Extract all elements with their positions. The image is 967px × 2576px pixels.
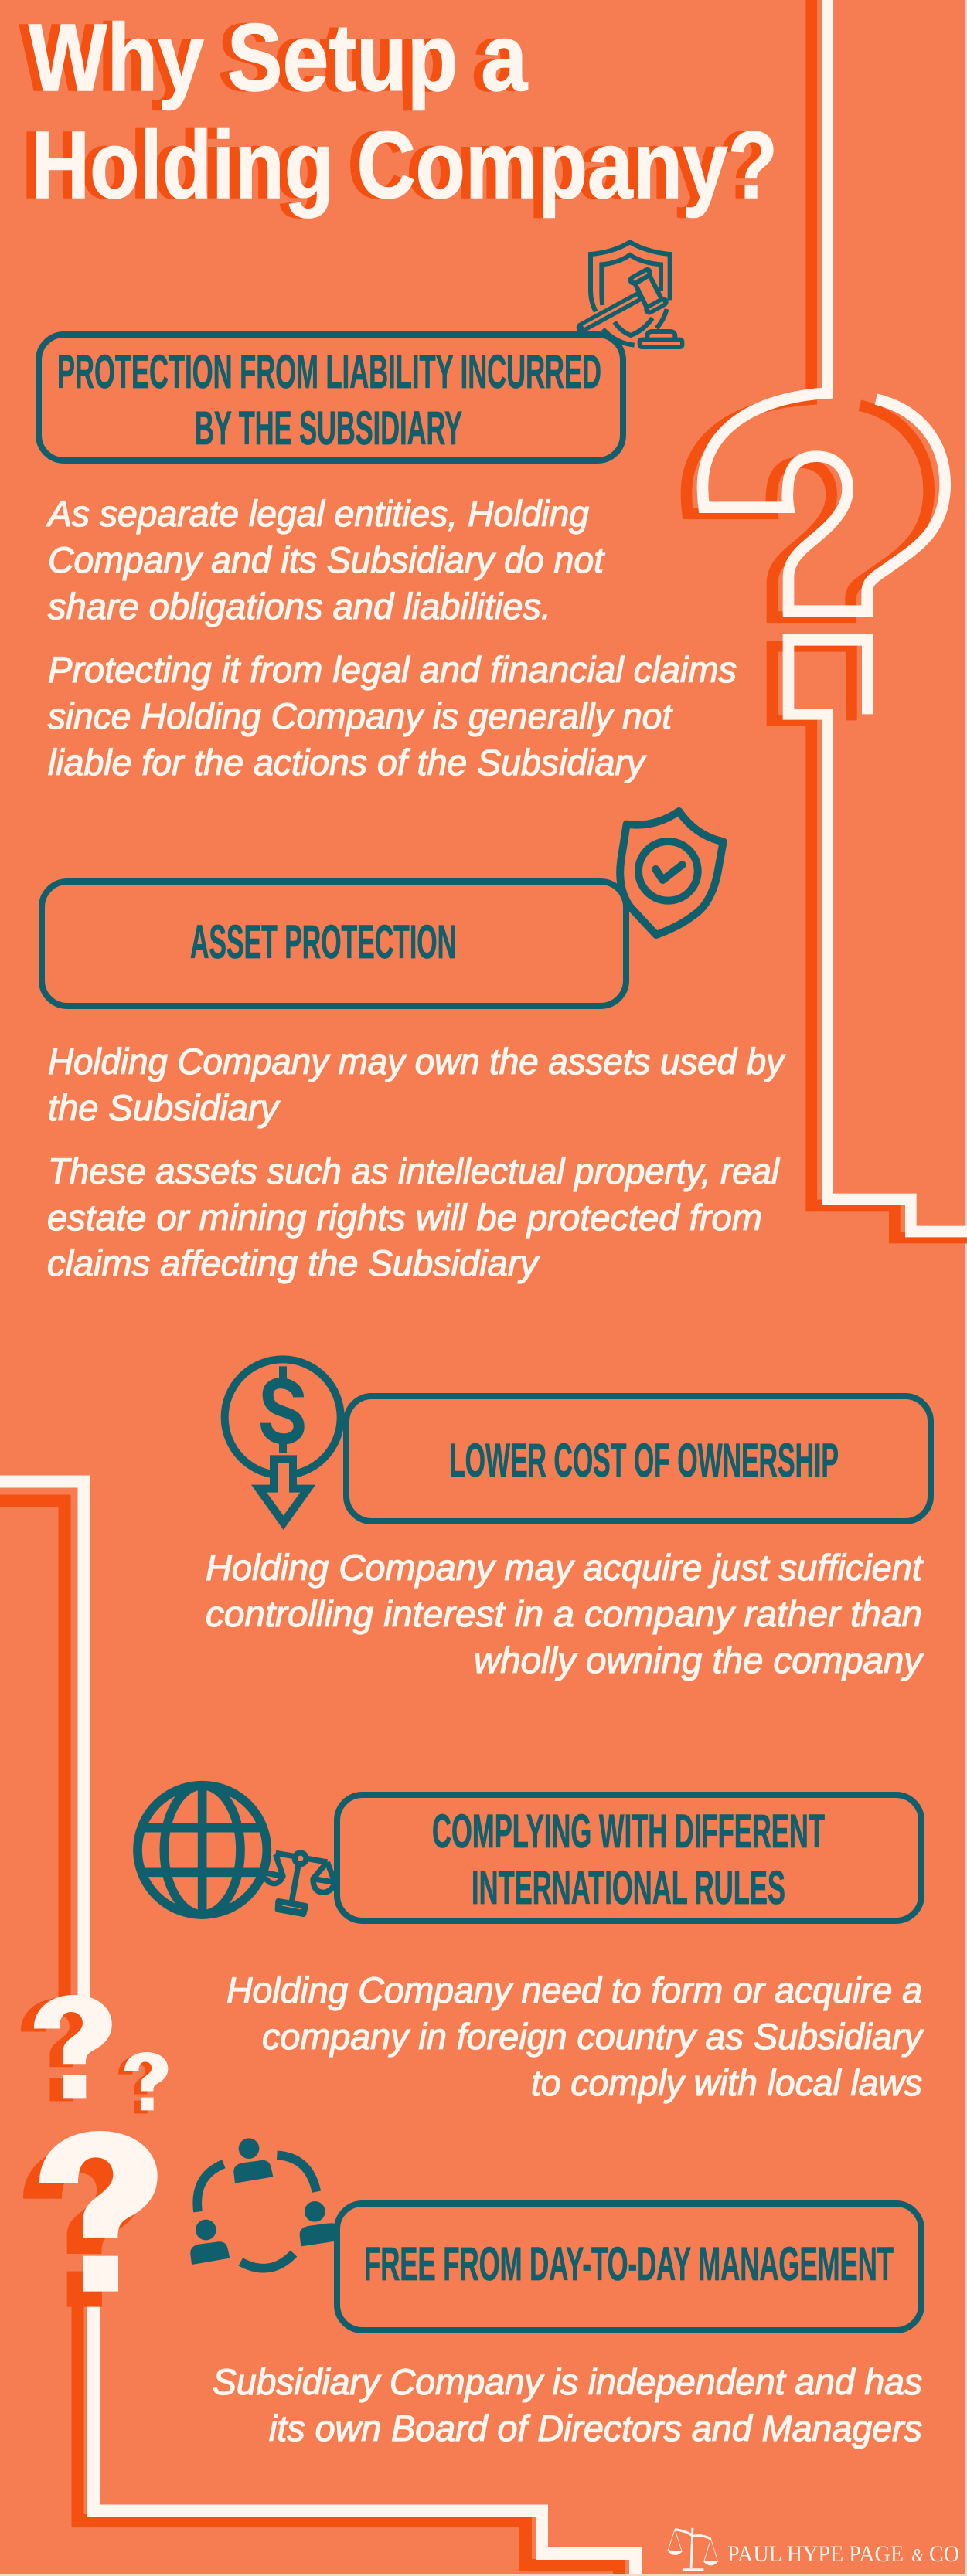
text block: since Holding Company is generally not xyxy=(48,695,673,736)
text block: Company and its Subsidiary do not xyxy=(48,539,605,580)
text block xyxy=(213,2361,922,2449)
text block: claims affecting the Subsidiary xyxy=(47,1242,540,1283)
title: Why Setup a xyxy=(19,5,519,111)
panel: international rules xyxy=(138,1786,924,2103)
text block: Protecting it from legal and financial claims xyxy=(48,649,737,690)
panel: free from day-to-day management xyxy=(190,2138,922,2449)
text block: Holding Company may acquire just sufficient xyxy=(206,1547,924,1588)
icon: globe with scales xyxy=(138,1786,335,1915)
heading box xyxy=(337,2204,921,2330)
text block: As separate legal entities, Holding xyxy=(46,493,589,534)
text block: Holding Company need to form or acquire a xyxy=(226,1969,922,2010)
panel: protection from liability xyxy=(39,242,737,783)
heading box xyxy=(337,1795,921,1921)
right connector line with outlined question mark xyxy=(686,0,967,1238)
heading: ASSET PROTECTION xyxy=(190,916,456,968)
title: Holding Company? xyxy=(31,113,778,219)
text block: share obligations and liabilities. xyxy=(48,586,551,627)
icon: three people in a cycle xyxy=(190,2138,339,2268)
text block: company in foreign country as Subsidiary xyxy=(262,2016,924,2057)
title xyxy=(19,5,778,219)
heading box xyxy=(346,1396,931,1521)
wordmark: CO xyxy=(929,2541,959,2567)
text block: Holding Company may own the assets used by xyxy=(48,1041,785,1082)
heading box xyxy=(42,882,626,1006)
title: Holding Company? xyxy=(22,113,768,219)
heading xyxy=(432,1805,825,1914)
text block: its own Board of Directors and Managers xyxy=(269,2408,922,2449)
heading xyxy=(57,345,601,454)
icon: dollar with down arrow xyxy=(225,1359,341,1530)
wordmark: & xyxy=(911,2546,924,2566)
heading box xyxy=(39,335,623,460)
panel: lower cost of ownership xyxy=(206,1359,931,1681)
icon: shield and gavel xyxy=(582,242,683,347)
logo: Paul Hype Page & Co xyxy=(668,2528,959,2570)
icon: three solid question marks xyxy=(21,1995,168,2307)
panel: asset protection xyxy=(42,811,785,1283)
icon: balance scales xyxy=(668,2528,718,2570)
heading: BY THE SUBSIDIARY xyxy=(195,402,462,454)
text block: the Subsidiary xyxy=(48,1087,280,1128)
text block: liable for the actions of the Subsidiary xyxy=(48,742,646,783)
text block xyxy=(206,1547,924,1681)
text block xyxy=(46,493,737,783)
text block: wholly owning the company xyxy=(474,1640,924,1681)
wordmark: PAUL HYPE PAGE xyxy=(727,2541,904,2567)
text block: These assets such as intellectual property, real xyxy=(48,1150,781,1191)
text block: Subsidiary Company is independent and has xyxy=(213,2361,922,2402)
title: Why Setup a xyxy=(29,5,528,111)
text block: estate or mining rights will be protected from xyxy=(47,1197,762,1238)
text block: controlling interest in a company rather than xyxy=(206,1593,922,1634)
text block xyxy=(47,1041,785,1283)
icon: shield with check xyxy=(620,811,724,935)
text block xyxy=(226,1969,924,2103)
left connector line xyxy=(0,1482,635,2574)
text block: to comply with local laws xyxy=(531,2062,922,2103)
